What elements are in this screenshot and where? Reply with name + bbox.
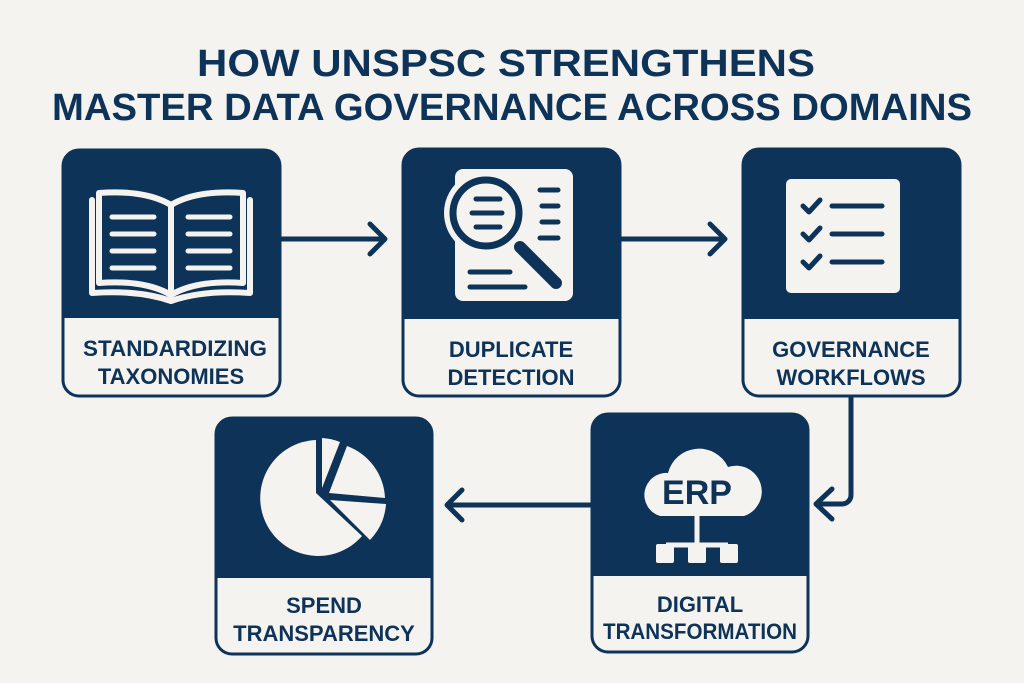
title: MASTER DATA GOVERNANCE ACROSS DOMAINS [52, 87, 972, 129]
label: GOVERNANCE [772, 337, 930, 362]
panel: governance workflows [743, 149, 960, 396]
panel: spend transparency [216, 418, 432, 654]
panel: spend transparency: TRANSPARENCY [233, 621, 415, 646]
panel: digital transformation [592, 414, 808, 652]
arrow 3 [816, 398, 851, 519]
icon: document with magnifier [444, 169, 573, 301]
arrow 4 [447, 490, 590, 520]
title [52, 43, 972, 129]
label: STANDARDIZING [83, 336, 267, 361]
panel: standardizing taxonomies: TAXONOMIES [98, 364, 244, 389]
panel: digital transformation: TRANSFORMATION [603, 619, 797, 644]
arrow 1 [282, 224, 385, 254]
arrow 2 [622, 224, 725, 254]
panel: duplicate detection: DETECTION [447, 365, 575, 390]
label: SPEND [286, 593, 362, 618]
icon: ERP cloud network [644, 449, 762, 563]
panel: standardizing taxonomies [63, 150, 280, 396]
panel: duplicate detection [403, 149, 620, 396]
icon: open book [92, 192, 250, 301]
panel: governance workflows: WORKFLOWS [776, 365, 926, 390]
icon: pie chart [260, 438, 386, 556]
icon: checklist [786, 179, 900, 293]
label: DUPLICATE [449, 337, 573, 362]
icon: ERP cloud network: ERP [662, 474, 732, 512]
label: DIGITAL [657, 592, 743, 617]
title: HOW UNSPSC STRENGTHENS [197, 43, 815, 85]
